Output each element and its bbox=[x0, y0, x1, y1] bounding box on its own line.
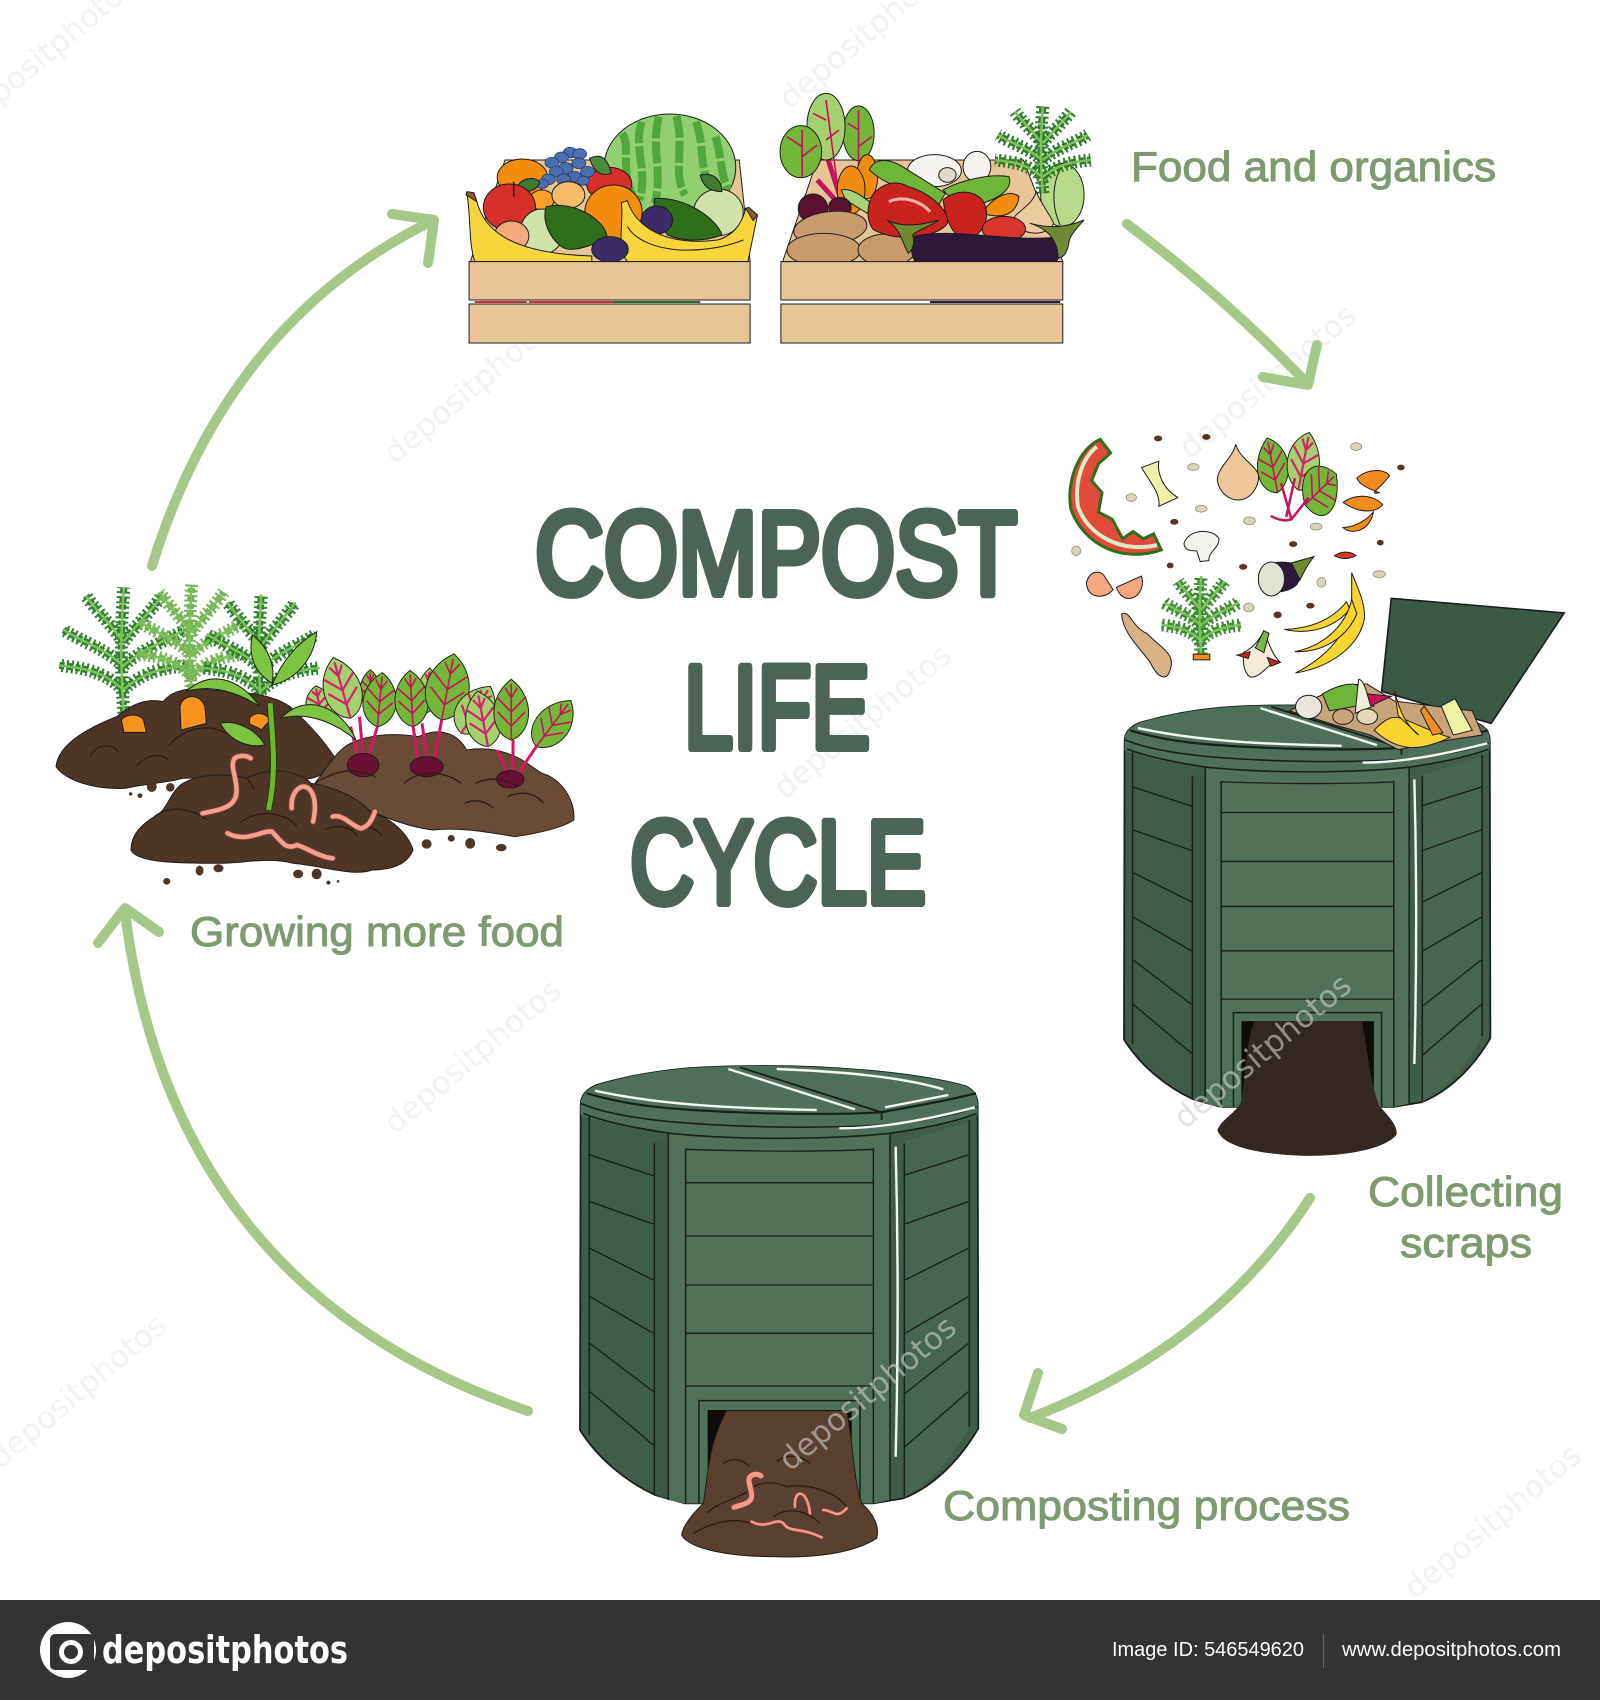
carrot foliage bbox=[59, 585, 320, 713]
watermark texts: depositphotos bbox=[1397, 1437, 1589, 1606]
scrap: potato peel bbox=[1122, 613, 1171, 677]
illustration: food crates bbox=[466, 93, 1091, 343]
right soil mound bbox=[315, 732, 574, 837]
carrots bbox=[121, 697, 270, 732]
worms bbox=[202, 756, 375, 858]
crate front slats bbox=[781, 262, 1063, 343]
watermark texts: depositphotos bbox=[377, 972, 569, 1141]
scrap: onion bbox=[1217, 444, 1259, 500]
compost bin: composting process bbox=[580, 1066, 978, 1557]
label: food and organics: Food and organics bbox=[1131, 143, 1496, 190]
scrap: banana peel bbox=[1285, 573, 1365, 673]
arrow: composting to growing bbox=[98, 908, 528, 1411]
scraps in bin bbox=[1290, 679, 1483, 750]
arrow: growing to food bbox=[152, 214, 434, 566]
footer band bbox=[0, 1600, 1600, 1700]
bin lid bbox=[1382, 598, 1564, 723]
scrap: pepper end bbox=[1334, 552, 1356, 559]
footer logo icon bbox=[40, 1622, 96, 1678]
scrap: apple core bbox=[1142, 461, 1178, 506]
scrap: mushroom bbox=[1184, 531, 1219, 562]
watermark texts: depositphotos bbox=[1172, 297, 1364, 466]
scrap: pepper stem bbox=[1237, 631, 1280, 677]
compost pile with worms bbox=[682, 1411, 878, 1557]
scrap: chard bbox=[1252, 427, 1347, 526]
watermark over bins bbox=[772, 967, 1359, 1478]
scrap: carrot top bbox=[1162, 576, 1241, 660]
arrow: food to collecting bbox=[1127, 224, 1317, 385]
compost bin: collecting scraps bbox=[1124, 705, 1490, 1107]
dark compost pile in bin bbox=[1217, 1021, 1397, 1156]
scrap: orange peel bbox=[1343, 471, 1390, 531]
front soil mound bbox=[131, 771, 413, 872]
website: www.depositphotos.com bbox=[1341, 1639, 1561, 1661]
label: growing more food: Growing more food bbox=[190, 908, 564, 955]
beets bbox=[347, 753, 524, 788]
chard leaves behind right mound bbox=[303, 650, 585, 756]
arrow: collecting to composting bbox=[1024, 1198, 1310, 1429]
label: composting process: Composting process bbox=[943, 1482, 1350, 1529]
scrap: eggshells bbox=[1086, 572, 1142, 598]
back-left soil mound bbox=[56, 689, 336, 788]
label: collecting scraps bbox=[1368, 1168, 1563, 1266]
watermark over bins: depositphotos bbox=[772, 1309, 964, 1478]
watermark texts: depositphotos bbox=[377, 302, 569, 471]
scrap: watermelon rind bbox=[1070, 439, 1161, 554]
scrap: eggplant end bbox=[1258, 557, 1314, 596]
soil crumbs bbox=[129, 781, 507, 885]
watermark texts: depositphotos bbox=[767, 637, 959, 806]
title bbox=[535, 488, 1017, 929]
title: LIFE bbox=[684, 642, 870, 774]
title: CYCLE bbox=[630, 797, 926, 929]
illustration: falling scraps bbox=[1070, 427, 1405, 677]
open lid and scraps on bin bbox=[1217, 598, 1564, 1156]
beet stems bbox=[351, 717, 536, 773]
label: collecting scraps: Collecting bbox=[1368, 1168, 1563, 1215]
crate front slats bbox=[469, 262, 750, 343]
title: COMPOST bbox=[535, 488, 1017, 620]
label: collecting scraps: scraps bbox=[1400, 1219, 1532, 1266]
image id: Image ID: 546549620 bbox=[1112, 1639, 1304, 1661]
illustration: garden with growing food bbox=[56, 585, 585, 885]
seeds bbox=[1154, 434, 1405, 618]
footer logo text: depositphotos bbox=[102, 1628, 348, 1672]
sprout bbox=[186, 632, 356, 810]
crate: vegetables bbox=[780, 93, 1091, 343]
watermark over bins: depositphotos bbox=[1167, 967, 1359, 1136]
crate: fruit bbox=[466, 114, 757, 343]
